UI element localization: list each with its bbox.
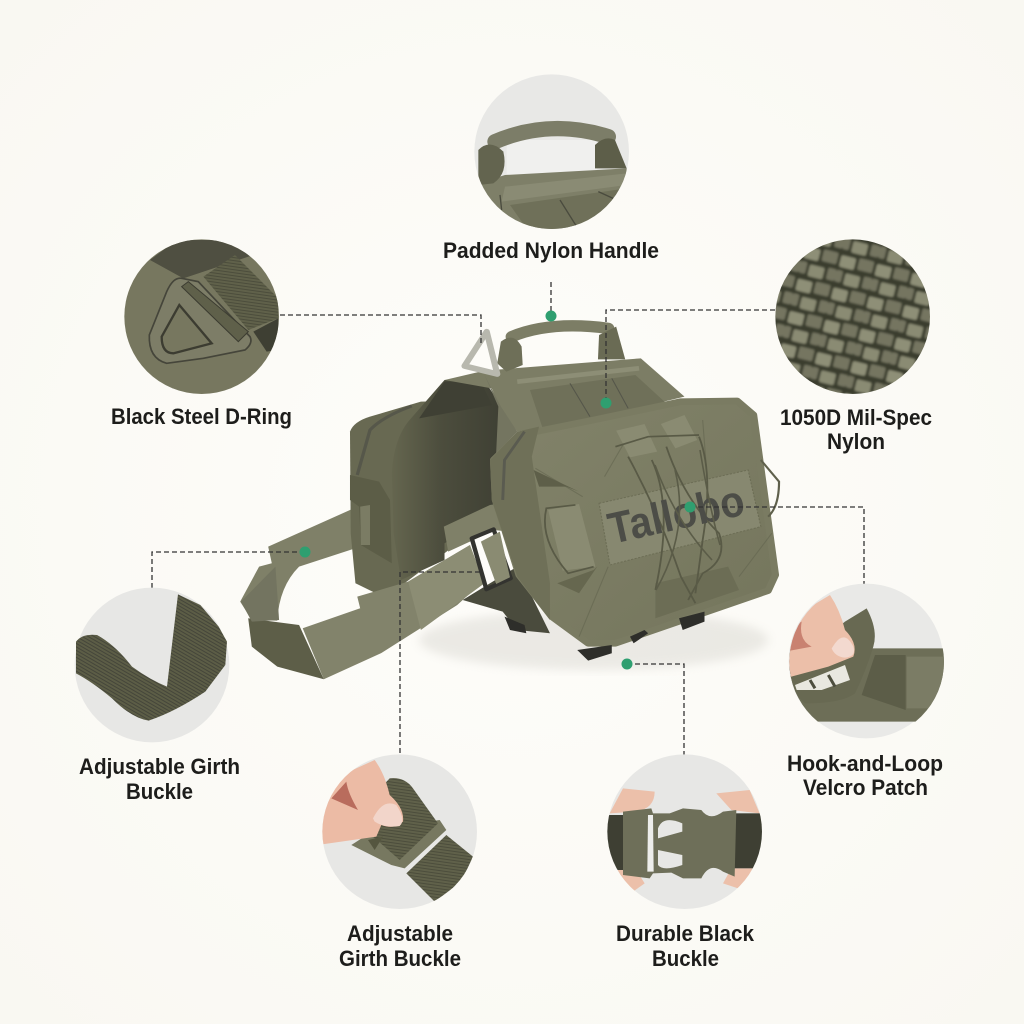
near saddle pouch <box>490 401 775 643</box>
label: adjustable girth buckle center <box>339 921 461 971</box>
infographic canvas <box>74 74 944 966</box>
callout dots <box>300 310 696 670</box>
detail circle: hook-and-loop velcro patch <box>785 584 948 738</box>
label: 1050D mil-spec nylon: Nylon <box>827 429 885 454</box>
label: hook-and-loop velcro patch: Velcro Patch <box>803 775 928 800</box>
main product: tactical saddlebag dog pack <box>240 326 779 679</box>
label: durable black buckle: Durable Black <box>616 921 755 946</box>
steel D-ring <box>465 332 497 374</box>
dark inner lining <box>392 380 501 580</box>
patch logo text: Tallobo <box>604 476 749 554</box>
detail circle: adjustable girth buckle <box>318 754 477 909</box>
strap junction <box>444 500 525 552</box>
label: adjustable girth buckle center: Girth Buckle <box>339 946 461 971</box>
ground shadow <box>419 610 768 670</box>
label: 1050D mil-spec nylon: 1050D Mil-Spec <box>780 405 932 430</box>
underside hardware <box>505 612 704 661</box>
label: adjustable girth buckle left <box>79 754 240 804</box>
side hook <box>761 460 779 517</box>
label: black steel D-ring: Black Steel D-Ring <box>111 404 292 429</box>
carry handle <box>497 326 625 372</box>
label: adjustable girth buckle left: Buckle <box>126 779 193 804</box>
detail circle: adjustable girth strap <box>75 588 229 742</box>
detail circle: padded nylon handle <box>473 74 629 233</box>
velcro logo patch <box>599 470 761 565</box>
label: adjustable girth buckle left: Adjustable Girth <box>79 754 240 779</box>
bungee cords <box>545 435 721 603</box>
detail circle: durable black buckle <box>603 754 766 909</box>
waist strap upper <box>240 508 355 621</box>
label: adjustable girth buckle center: Adjustable <box>347 921 453 946</box>
detail circle: 1050D nylon weave texture <box>775 239 930 394</box>
label: durable black buckle <box>616 921 755 971</box>
label: durable black buckle: Buckle <box>652 946 719 971</box>
far saddle pouch <box>350 400 495 597</box>
leader lines <box>152 282 864 757</box>
top saddle panel <box>445 358 684 507</box>
label: hook-and-loop velcro patch: Hook-and-Loop <box>787 751 943 776</box>
label: padded nylon handle: Padded Nylon Handle <box>443 238 659 263</box>
label: 1050D mil-spec nylon <box>780 405 932 454</box>
label: hook-and-loop velcro patch <box>787 751 943 800</box>
cords over logo <box>655 450 720 590</box>
side release buckle <box>472 529 511 589</box>
detail circle: black steel D-ring <box>124 239 279 394</box>
webbing straps on pouch <box>548 415 739 618</box>
waist strap lower and velcro cuff <box>241 545 485 679</box>
underside behind strap <box>463 567 550 633</box>
